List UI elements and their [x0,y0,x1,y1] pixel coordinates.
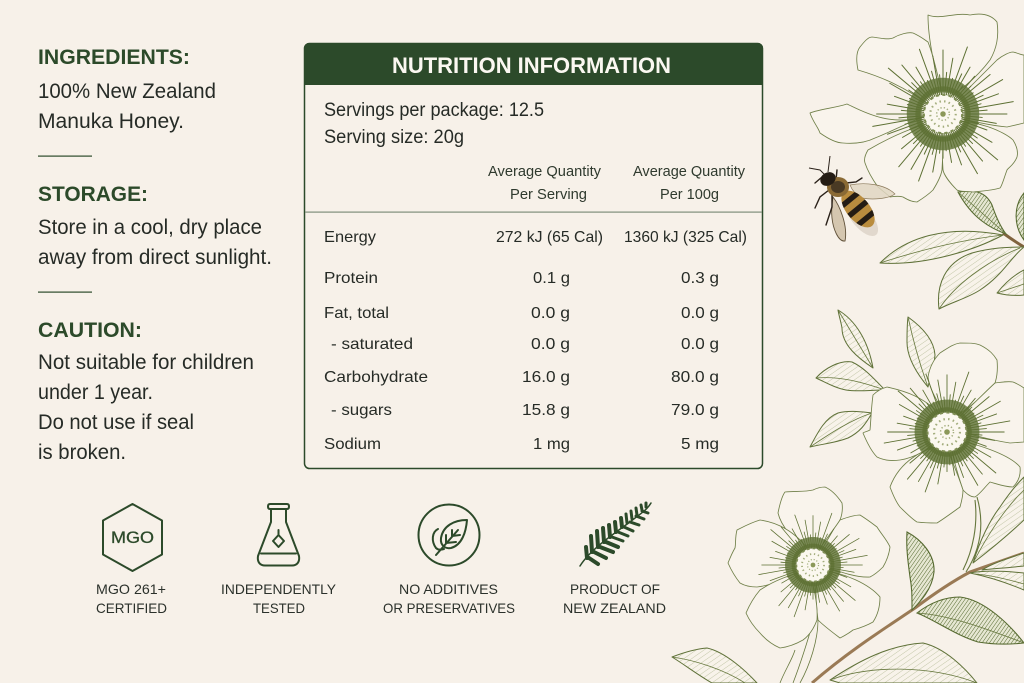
flower: middle right [863,343,1024,572]
legs [815,170,862,225]
servings info: Servings per package: 12.5 [324,100,544,121]
row: sodium: 5 mg [681,436,719,453]
storage heading: STORAGE: [38,183,148,206]
center [796,548,830,582]
column header: per serving: Average Quantity [488,164,602,180]
abdomen [835,185,881,233]
ingredients text block [38,46,216,133]
row: saturated [331,336,719,353]
servings info: Serving size: 20g [324,127,464,148]
label: product of New Zealand: PRODUCT OF [570,581,660,597]
icon: leaf in circle [418,504,480,566]
flower 2 branch leaves [810,310,935,447]
row: fat total: Fat, total [324,305,389,322]
center [928,413,966,451]
row: protein: 0.1 g [533,270,570,287]
caution body: is broken. [38,441,126,464]
row: protein: Protein [324,270,378,287]
row: saturated: 0.0 g [681,336,719,353]
row: fat total [324,305,719,322]
bee [809,156,895,241]
rays [759,513,867,617]
petals [928,14,998,100]
icon: silver fern [580,503,651,566]
icon: lab flask [258,504,299,566]
panel: nutrition information [304,43,763,468]
rays [884,372,1010,492]
rays [873,47,1013,181]
storage body: away from direct sunlight. [38,246,272,269]
panel title: NUTRITION INFORMATION [392,53,671,78]
ingredients body: Manuka Honey. [38,110,184,133]
ingredients heading: INGREDIENTS: [38,46,190,69]
flower: lower middle [728,487,890,648]
icon: MGO hexagon: MGO [111,529,154,547]
label: independently tested: INDEPENDENTLY [221,581,337,597]
storage text block [38,183,272,269]
storage body [38,216,272,269]
stem [812,553,1024,683]
row: saturated: 0.0 g [531,336,570,353]
leaves [907,532,934,610]
row: sugars: - sugars [331,402,392,419]
label: product of New Zealand: NEW ZEALAND [563,600,666,616]
row: carbohydrate: Carbohydrate [324,369,428,386]
petals [778,487,842,555]
upper right branch leaves [880,191,1024,309]
caution body: under 1 year. [38,381,153,404]
servings info [324,100,544,148]
column header: per 100g: Average Quantity [633,164,746,180]
label: no additives: OR PRESERVATIVES [383,600,515,616]
panel header bar [304,43,763,85]
row: energy: 272 kJ (65 Cal) [496,229,603,246]
caution body: Not suitable for children [38,351,254,374]
caution heading: CAUTION: [38,319,142,342]
caution body [38,351,254,464]
row: sugars [331,402,719,419]
lower right branch and leaves [672,477,1024,683]
label: MGO certified [96,581,167,616]
caution text block [38,319,254,464]
center [924,95,962,133]
petals [928,343,997,420]
row: sugars: 79.0 g [671,402,719,419]
column header: per 100g: Per 100g [660,187,719,203]
wings [850,184,895,199]
storage body: Store in a cool, dry place [38,216,262,239]
row: energy: 1360 kJ (325 Cal) [624,229,747,246]
row: fat total: 0.0 g [531,305,570,322]
column header: per serving: Per Serving [510,187,587,203]
label: independently tested: TESTED [253,600,305,616]
ingredients body: 100% New Zealand [38,80,216,103]
row: carbohydrate: 80.0 g [671,369,719,386]
column header: per serving [488,164,602,203]
label: MGO certified: CERTIFIED [96,600,167,616]
row: protein [324,270,719,287]
label: no additives: NO ADDITIVES [399,581,498,597]
label: independently tested [221,581,337,616]
ingredients body [38,80,216,133]
row: fat total: 0.0 g [681,305,719,322]
row: sodium: Sodium [324,436,381,453]
row: sugars: 15.8 g [522,402,570,419]
icon: MGO hexagon [103,504,162,571]
flower: top right [810,14,1024,202]
row: sodium [324,436,719,453]
label: MGO certified: MGO 261+ [96,581,166,597]
column header: per 100g [633,164,746,203]
stem [963,497,981,572]
thorax [827,177,849,197]
row: energy [324,229,747,246]
row: protein: 0.3 g [681,270,719,287]
head [818,169,838,189]
caution body: Do not use if seal [38,411,194,434]
row: carbohydrate [324,369,719,386]
row: carbohydrate: 16.0 g [522,369,570,386]
row: energy: Energy [324,229,376,246]
label: product of New Zealand [563,581,666,616]
label: no additives [383,581,515,616]
row: sodium: 1 mg [533,436,570,453]
row: saturated: - saturated [331,336,413,353]
